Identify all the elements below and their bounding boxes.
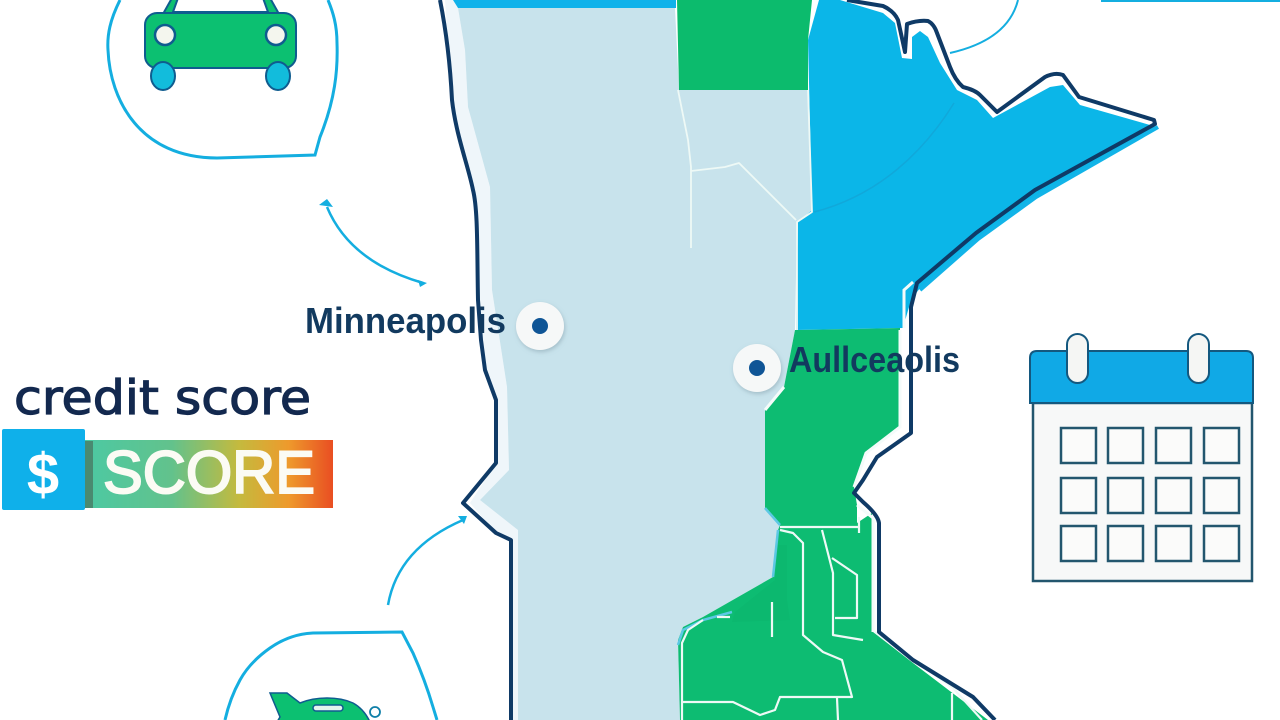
label: Minneapolis: Minneapolis: [305, 300, 506, 341]
state outline northeast: [847, 0, 1155, 720]
score word: SCORE: [103, 439, 315, 506]
region: western light blue: [458, 8, 812, 720]
region: central green: [678, 328, 988, 720]
pale strip inside west border: [445, 0, 520, 720]
state outline west: [440, 0, 511, 720]
blue coast stripe: [920, 127, 1158, 290]
icon: car: [145, 0, 296, 90]
label: second city: Aullceaolis: [789, 339, 960, 380]
light edge beside the coast: [765, 282, 913, 632]
region: northeast blue arrowhead: [796, 0, 1158, 330]
calendar rings: [1067, 334, 1088, 383]
callout: savings: [225, 632, 437, 720]
score badge: [2, 429, 333, 510]
bubble outline: [108, 0, 337, 158]
calendar day cells: [1061, 428, 1239, 561]
top right bar fragment: [1101, 0, 1280, 2]
subtle boundary in blue region: [814, 103, 954, 212]
region: top blue band: [453, 0, 676, 8]
county lines: [678, 90, 982, 720]
callout: car loan: [108, 0, 337, 158]
gradient bar: [85, 440, 333, 508]
pin: second city: [733, 344, 781, 392]
light blue county edges: [678, 508, 780, 645]
icon: calendar: [1030, 334, 1253, 581]
arrow: car to map: [319, 199, 427, 287]
icon: piggy bank: [270, 693, 380, 720]
pin: Minneapolis: [516, 302, 564, 350]
calendar header: [1030, 351, 1253, 403]
map of Minnesota: [440, 0, 1158, 720]
dollar sign: $: [27, 442, 59, 507]
arrow: top right to map: [950, 0, 1018, 53]
dollar tile: [2, 429, 85, 510]
bubble outline: [225, 632, 437, 720]
heading: credit score: credit score: [14, 371, 311, 426]
region: northern green block: [677, 0, 812, 90]
arrow: piggy bank to map: [388, 516, 467, 605]
calendar page: [1033, 403, 1252, 581]
shaded patch in green: [732, 545, 790, 622]
